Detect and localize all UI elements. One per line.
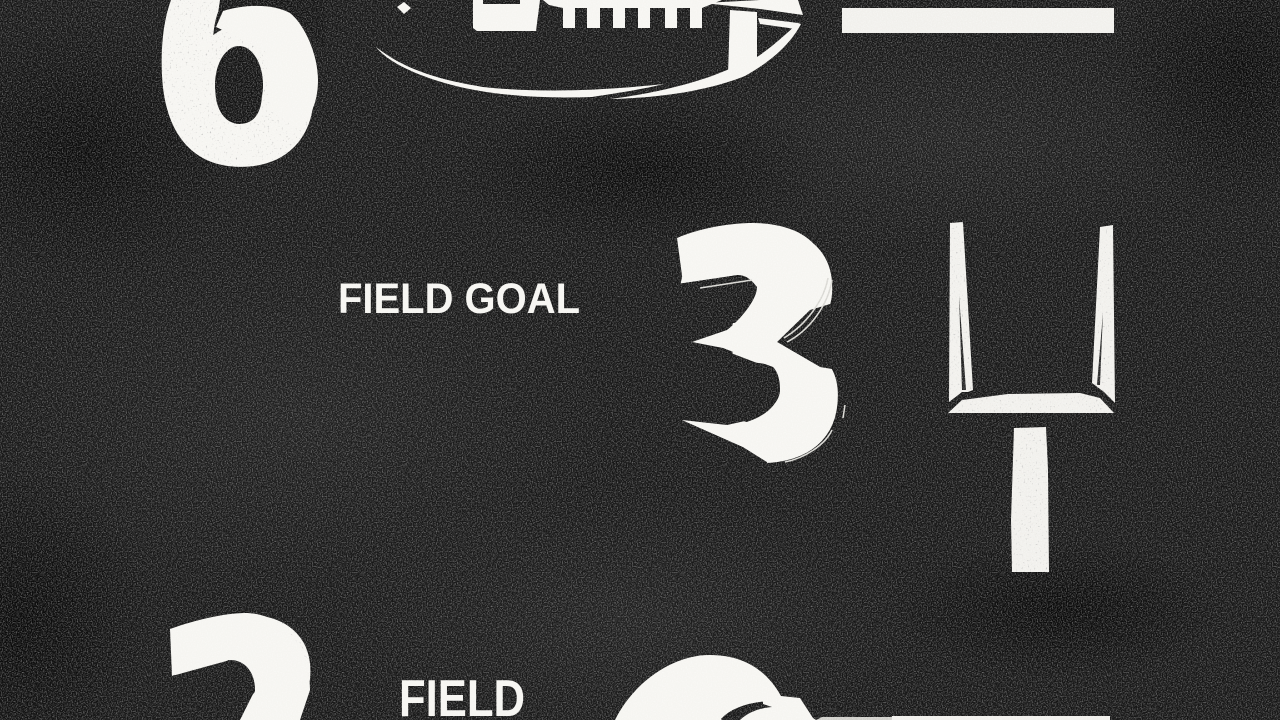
heading: field goal: FIELD GOAL — [338, 275, 580, 323]
row 2: field goal — [338, 159, 1115, 572]
row 3: cropped by the page edge — [160, 565, 1110, 720]
brush touch-ups on the numeral — [664, 223, 850, 472]
icon: helmet — [615, 655, 892, 720]
icon: football — [376, 0, 803, 99]
icon: goal post — [948, 222, 1115, 572]
number 3: 3 — [670, 159, 848, 528]
score bar — [892, 716, 1110, 720]
score bar — [842, 8, 1114, 33]
row 1: touchdown points and football — [157, 0, 1114, 220]
